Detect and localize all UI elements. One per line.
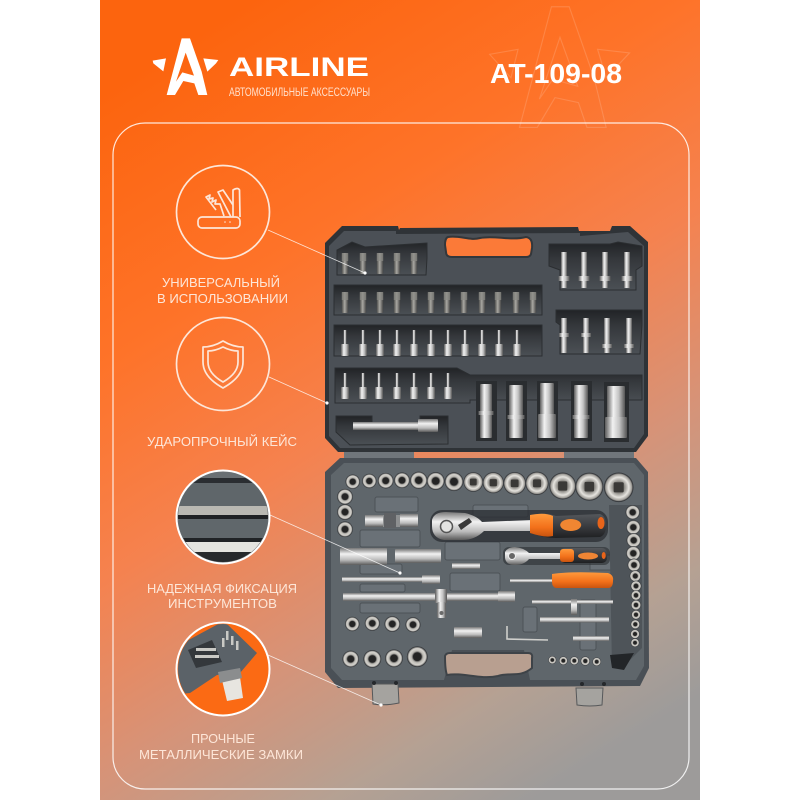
hex key [507,626,548,640]
photo: latch detail [178,624,257,701]
feature 4: metal latches photo circle [170,622,270,716]
feature 3 caption [147,582,297,611]
feature 2: shield icon circle [176,318,270,410]
feature 4 caption: ПРОЧНЫЕ [191,732,255,746]
handle opening [445,653,532,677]
upper tray shell [325,226,648,452]
bits: row 1 [342,253,417,274]
adapters [340,548,441,565]
lower tray shell [325,458,649,688]
rounded frame [113,123,689,789]
feature 1 caption: В ИСПОЛЬЗОВАНИИ [157,292,288,306]
right socket channel [609,505,642,668]
feature 1: multi-tool icon circle [176,166,270,258]
feature 4 caption [139,732,303,762]
logo star mark [153,38,218,95]
deep sockets: middle right [559,318,634,353]
small ratchet [503,547,610,565]
feature 1 caption [157,275,288,306]
bits: row 2 [342,292,536,313]
upper tray floor [329,231,644,448]
sockets: top row [345,472,634,502]
well: right middle [556,310,642,354]
small T-handle [532,599,613,615]
small extensions [540,617,609,641]
sockets: left column [337,489,353,537]
feature 3: tool fixation photo circle [176,470,270,564]
feature 2 caption: УДАРОПРОЧНЫЙ КЕЙС [147,434,297,449]
lower tray floor [331,463,644,680]
gradient background panel [100,0,700,800]
T-handle slider [435,589,447,618]
well: row 1 [337,242,427,275]
deep sockets: large [478,383,627,438]
well: row 4 [335,368,642,403]
case: lower tray [325,452,649,706]
screwdriver [510,572,613,588]
well: large sockets [476,381,629,442]
well: right top [549,242,642,290]
leader line 2 [269,377,329,405]
bits: row 3 [341,330,521,356]
large ratchet [430,510,608,542]
hinges [344,452,634,458]
feature 4 caption: МЕТАЛЛИЧЕСКИЕ ЗАМКИ [139,748,303,762]
feature 3 caption: НАДЕЖНАЯ ФИКСАЦИЯ [147,582,297,596]
logo: AIRLINE [153,38,370,99]
logo wordmark: AIRLINE [229,52,369,82]
case: upper tray [325,226,648,452]
latch left [372,681,399,705]
model number: AT-109-08 [490,58,622,89]
universal joint [365,513,418,528]
sockets: lower left [342,616,428,668]
well: extension [336,416,448,445]
infographic canvas [100,0,700,800]
well: row 3 [334,325,542,356]
corner shadow [610,653,634,670]
icon: multi-tool [198,188,240,228]
icon: shield [203,341,243,388]
leader line 3 [270,515,402,575]
sockets: right column [625,505,641,647]
feature 1 caption: УНИВЕРСАЛЬНЫЙ [162,275,280,290]
extension bar [353,419,438,432]
small joint and adapter [452,563,482,638]
latch right [576,682,606,706]
logo tagline: АВТОМОБИЛЬНЫЕ АКСЕССУАРЫ [229,87,370,99]
tray raised pads [360,497,618,650]
feature 3 caption: ИНСТРУМЕНТОВ [168,597,277,611]
bits: row 4 [341,373,452,399]
handle cut-out [445,237,532,257]
sockets: bottom row [548,656,601,666]
photo: tray detail [178,478,268,562]
extension bars [342,575,515,602]
well: row 2 [334,285,542,315]
deep sockets: top right [558,252,632,288]
ghost logo watermark [490,7,630,127]
leader line 1 [268,230,367,275]
leader line 4 [268,655,383,707]
